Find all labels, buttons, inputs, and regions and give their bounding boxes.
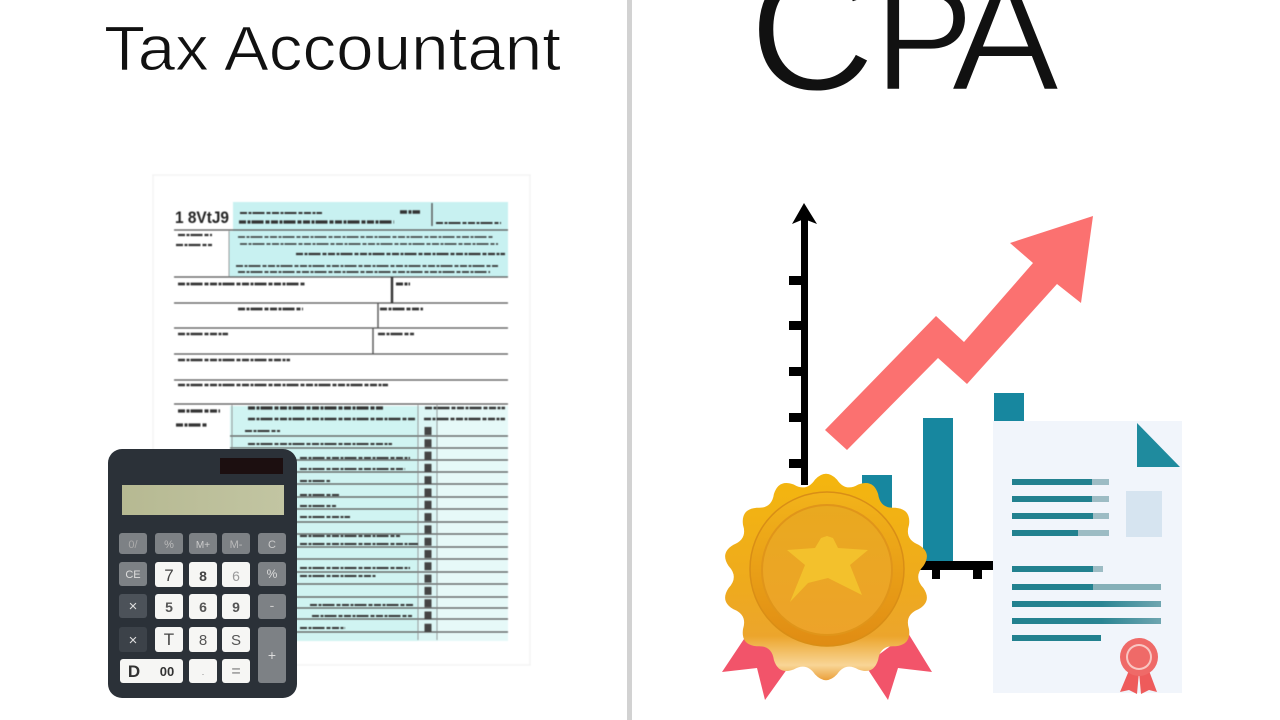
form shaded areas [229, 202, 508, 641]
key labels: % [267, 567, 278, 581]
number keys [120, 562, 250, 683]
report image placeholder [1126, 491, 1162, 537]
icon: growth chart [789, 203, 1093, 579]
key labels: × [129, 632, 137, 649]
chart baseline [900, 561, 993, 579]
report text lines, dark part [1012, 479, 1161, 641]
key labels: - [270, 597, 275, 613]
function keys [119, 533, 286, 683]
key labels: 7 [164, 566, 174, 585]
display [122, 485, 284, 515]
form fine print [176, 212, 505, 636]
key labels: 6 [232, 568, 240, 584]
key labels: × [129, 598, 137, 615]
key labels: % [164, 539, 174, 551]
key labels: D [128, 662, 140, 681]
key labels: 9 [232, 599, 240, 615]
key labels: T [164, 630, 174, 649]
key labels: C [268, 539, 276, 551]
small report seal [1120, 638, 1158, 694]
key labels [125, 539, 278, 681]
divider between columns [627, 0, 632, 720]
key labels: M+ [196, 540, 210, 551]
key labels: + [268, 647, 276, 663]
key labels: . [202, 667, 204, 677]
key labels: 8 [199, 568, 207, 584]
key labels: CE [125, 569, 141, 581]
icon: calculator [108, 449, 297, 698]
badge star [787, 536, 868, 602]
report text lines, light part [1012, 479, 1161, 590]
icon: report document [993, 421, 1182, 694]
key labels: 6 [199, 599, 207, 615]
chart bars [862, 393, 1024, 561]
badge ribbons [722, 633, 932, 700]
form number: 1 8VtJ9 [175, 208, 229, 227]
form page [153, 175, 530, 665]
badge inner disc [762, 505, 892, 635]
rising red arrow [825, 216, 1093, 450]
page corner fold [1137, 423, 1180, 467]
key labels: 5 [165, 599, 173, 615]
chart vertical axis [789, 203, 817, 485]
key labels: 0/ [128, 539, 139, 551]
badge outer ring [750, 492, 904, 646]
heading: Tax Accountant: Tax Accountant [104, 14, 562, 84]
key labels: = [231, 663, 241, 680]
icon: gold award badge [722, 474, 932, 700]
form ruled lines [174, 203, 508, 640]
badge scalloped edge [725, 474, 927, 680]
solar panel [220, 458, 283, 474]
icon: tax form document [153, 175, 530, 665]
key labels: S [231, 632, 241, 649]
key labels: 00 [160, 664, 174, 679]
calculator body [108, 449, 297, 698]
key labels: M- [230, 539, 243, 551]
key labels: 8 [199, 632, 207, 649]
report page [993, 421, 1182, 693]
